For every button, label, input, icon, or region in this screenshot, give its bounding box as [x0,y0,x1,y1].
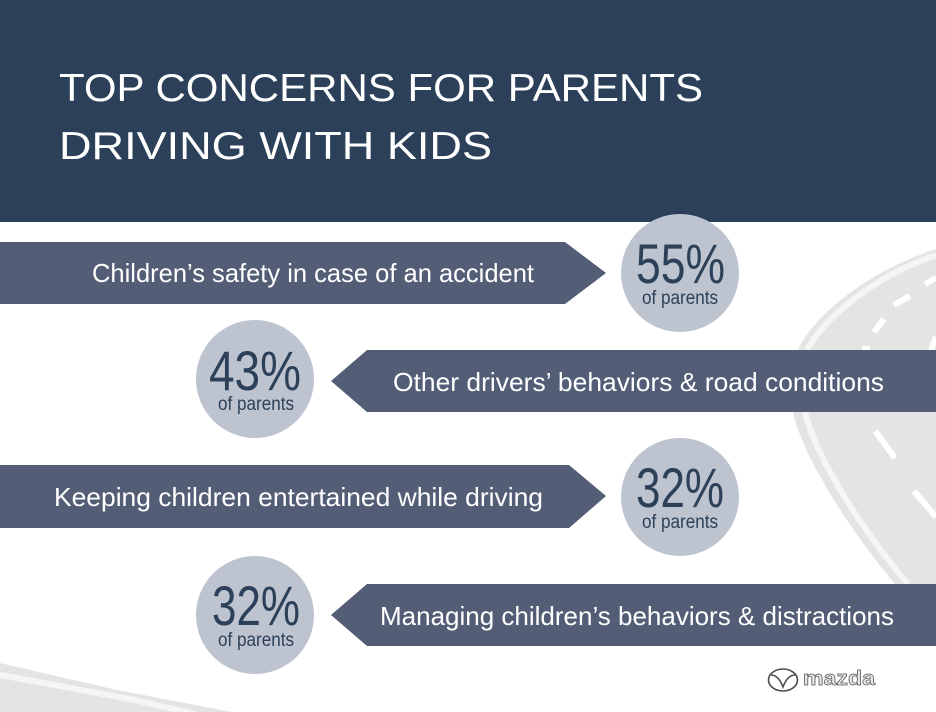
concern 2: stat circle: 43% [209,339,301,402]
concern 2: stat circle: of parents [218,394,294,415]
concern 3: banner: Keeping children entertained while driving [54,482,543,512]
road graphic: right [791,249,936,584]
title [59,67,703,168]
concern 4: stat circle: 32% [212,574,300,637]
concern 4: banner [331,584,936,646]
concern 2: banner: Other drivers’ behaviors & road conditions [393,367,884,397]
header band [0,0,936,222]
concern 4: banner: Managing children’s behaviors & distractions [380,601,894,631]
mazda logo [768,668,876,691]
concern 3: stat circle: 32% [636,456,724,519]
concern 1: stat circle: of parents [642,288,718,309]
concern 3: stat circle: of parents [642,512,718,533]
road graphic: bottom left [0,663,232,712]
concern 4: stat circle [196,556,314,674]
concern 2: stat circle [196,320,314,438]
concern 1: stat circle [621,214,739,332]
concern 3: banner [0,465,606,528]
mazda logo: mazda [803,668,876,690]
title: DRIVING WITH KIDS [59,125,492,168]
title: TOP CONCERNS FOR PARENTS [59,67,703,110]
concern 4: stat circle: of parents [218,630,294,651]
concern 1: banner: Children’s safety in case of an accident [92,258,535,288]
concern 2: banner [331,350,936,412]
concern 1: stat circle: 55% [636,232,725,295]
concern 1: banner [0,242,606,304]
concern 3: stat circle [621,438,739,556]
